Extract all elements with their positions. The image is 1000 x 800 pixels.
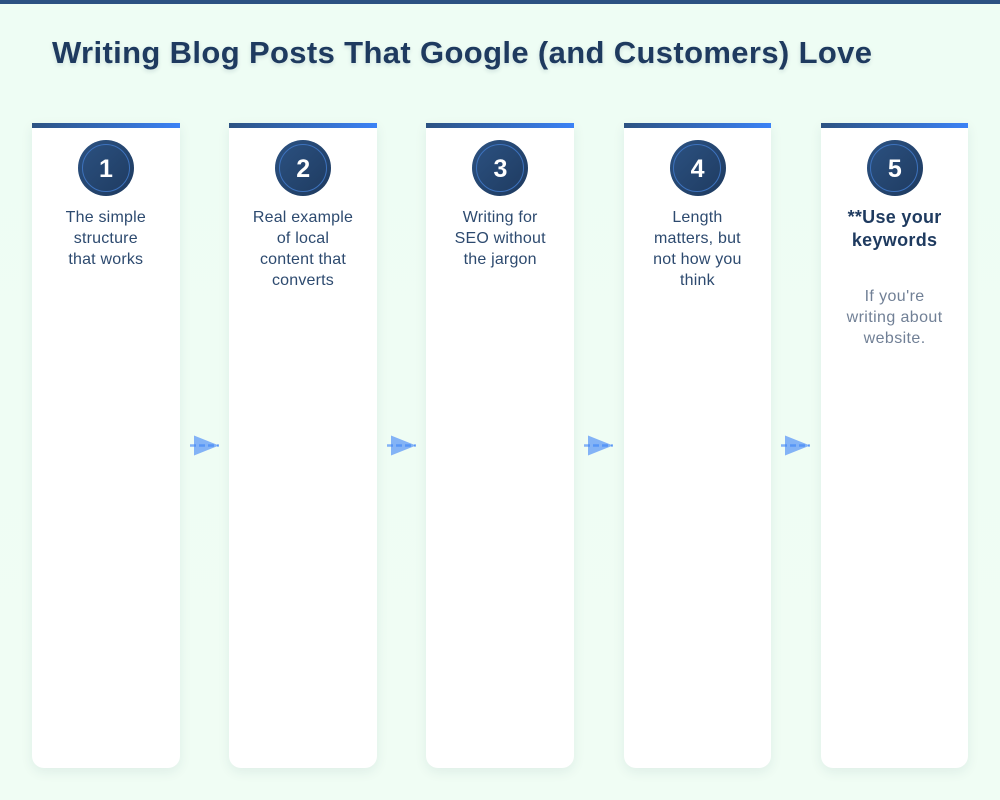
text: step 5 heading: keywords [852,230,937,250]
icon: number badge 5: 5 [888,155,902,183]
text: step 5 description: website. [864,330,926,347]
icon: number badge 4: 4 [691,155,705,183]
text: step 4 description: matters, but [654,230,741,247]
icon: number badge 1 [78,140,134,196]
text: step 1 description: The simple [66,209,146,226]
text: step 2 description: content that [260,251,346,268]
text: step 3 description: the jargon [464,251,537,268]
icon: number badge 3 [472,140,528,196]
text: step 4 description: think [680,272,715,289]
text: step 4 description: Length [672,209,722,226]
text: step 2 description: Real example [253,209,353,226]
panel: step 1 [32,123,180,768]
arrow: step 2 to 3 [387,436,416,456]
text: step 3 description: SEO without [455,230,546,247]
icon: number badge 4 [670,140,726,196]
text: step 5 description: writing about [847,309,943,326]
text: step 5 description [846,288,943,347]
icon: number badge 5 [867,140,923,196]
text: step 4 description [653,209,742,289]
arrow: step 4 to 5 [781,436,810,456]
text: step 3 description [455,209,546,268]
icon: number badge 1: 1 [99,155,113,183]
panel: step 4 [624,123,771,768]
text: step 1 description: that works [68,251,143,268]
text: step 3 description: Writing for [463,209,538,226]
arrow: step 3 to 4 [584,436,613,456]
text: step 5 heading [848,207,942,250]
panel: step 2 [229,123,377,768]
text: step 1 description: structure [74,230,138,247]
panel: step 5 [821,123,968,768]
text: step 2 description [253,209,353,289]
text: step 2 description: of local [277,230,329,247]
icon: number badge 2 [275,140,331,196]
arrow: step 1 to 2 [190,436,219,456]
panel: step 3 [426,123,574,768]
text: step 5 description: If you're [865,288,925,305]
text: step 4 description: not how you [653,251,742,268]
text: step 2 description: converts [272,272,334,289]
icon: number badge 3: 3 [493,155,507,183]
text: step 5 heading: **Use your [848,207,942,227]
title: Writing Blog Posts That Google (and Customers) Love [52,35,872,70]
icon: number badge 2: 2 [296,155,310,183]
text: step 1 description [66,209,146,268]
